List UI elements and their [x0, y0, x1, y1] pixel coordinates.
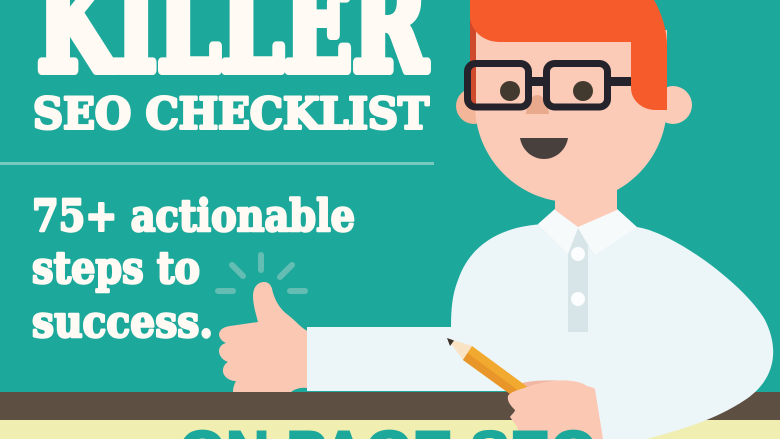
- shirt body: [307, 224, 773, 439]
- pencil: [447, 338, 529, 394]
- hair shadow: [470, 20, 476, 104]
- text block: tagline: steps to: [32, 243, 200, 294]
- hand shadow: [522, 380, 566, 392]
- panel: yellow section: [0, 420, 780, 439]
- nose: [526, 95, 549, 114]
- panel: brown desk band: [0, 392, 780, 420]
- hand holding pencil: [508, 380, 603, 439]
- text block: tagline: [32, 191, 355, 348]
- mouth: [520, 138, 568, 159]
- icon: sparkle lines: [218, 255, 305, 291]
- neck: [555, 190, 617, 235]
- neck overlap: [555, 196, 617, 227]
- left ear: [456, 88, 492, 124]
- right ear: [654, 86, 692, 124]
- head: [475, 30, 667, 202]
- glasses: [468, 64, 631, 107]
- left eye: [500, 81, 520, 101]
- right eye: [573, 81, 593, 101]
- shirt placket: [568, 228, 588, 332]
- collar: [538, 208, 637, 255]
- button top: [571, 247, 585, 261]
- icon: thumbs up hand: [219, 282, 308, 392]
- button bottom: [571, 292, 585, 306]
- text block: tagline: 75+ actionable: [32, 191, 355, 242]
- text block: tagline: success.: [32, 297, 213, 348]
- title: seo checklist: SEO CHECKLIST: [33, 90, 429, 140]
- character: man: [307, 0, 773, 439]
- divider: [0, 162, 434, 165]
- hair: [470, 0, 667, 110]
